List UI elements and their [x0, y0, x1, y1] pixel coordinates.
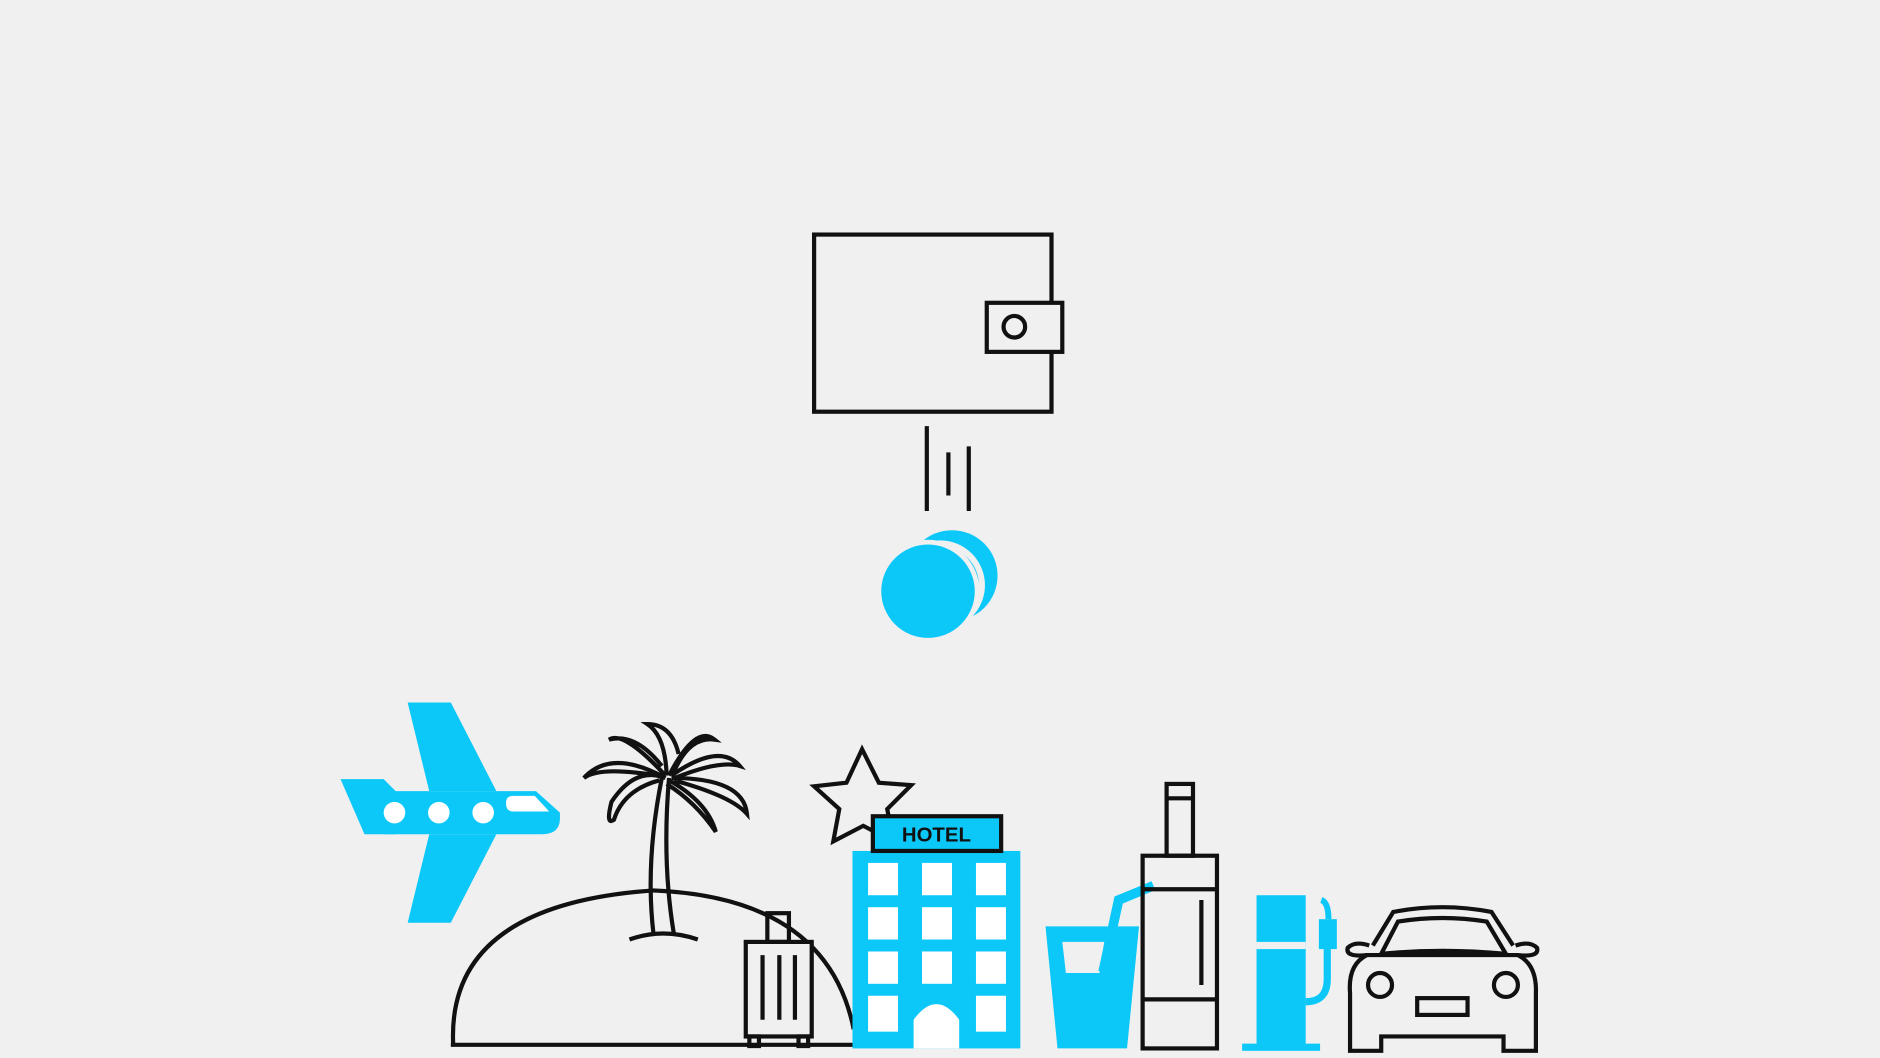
icon: star	[814, 749, 911, 841]
icon: fuel pump	[1242, 895, 1337, 1051]
icon: falling motion lines	[927, 426, 969, 511]
icon: suitcase	[746, 913, 812, 1046]
icon: car	[1347, 907, 1537, 1051]
icon: bottle	[1143, 784, 1217, 1048]
icon: airplane	[341, 703, 560, 923]
icon: coins	[879, 530, 998, 640]
icon: drink glass	[1046, 886, 1153, 1048]
icon: wallet	[814, 235, 1062, 412]
icon: hotel building	[852, 816, 1020, 1048]
icon: hotel building: HOTEL	[902, 824, 971, 846]
icon: island with palm tree	[451, 724, 854, 1045]
